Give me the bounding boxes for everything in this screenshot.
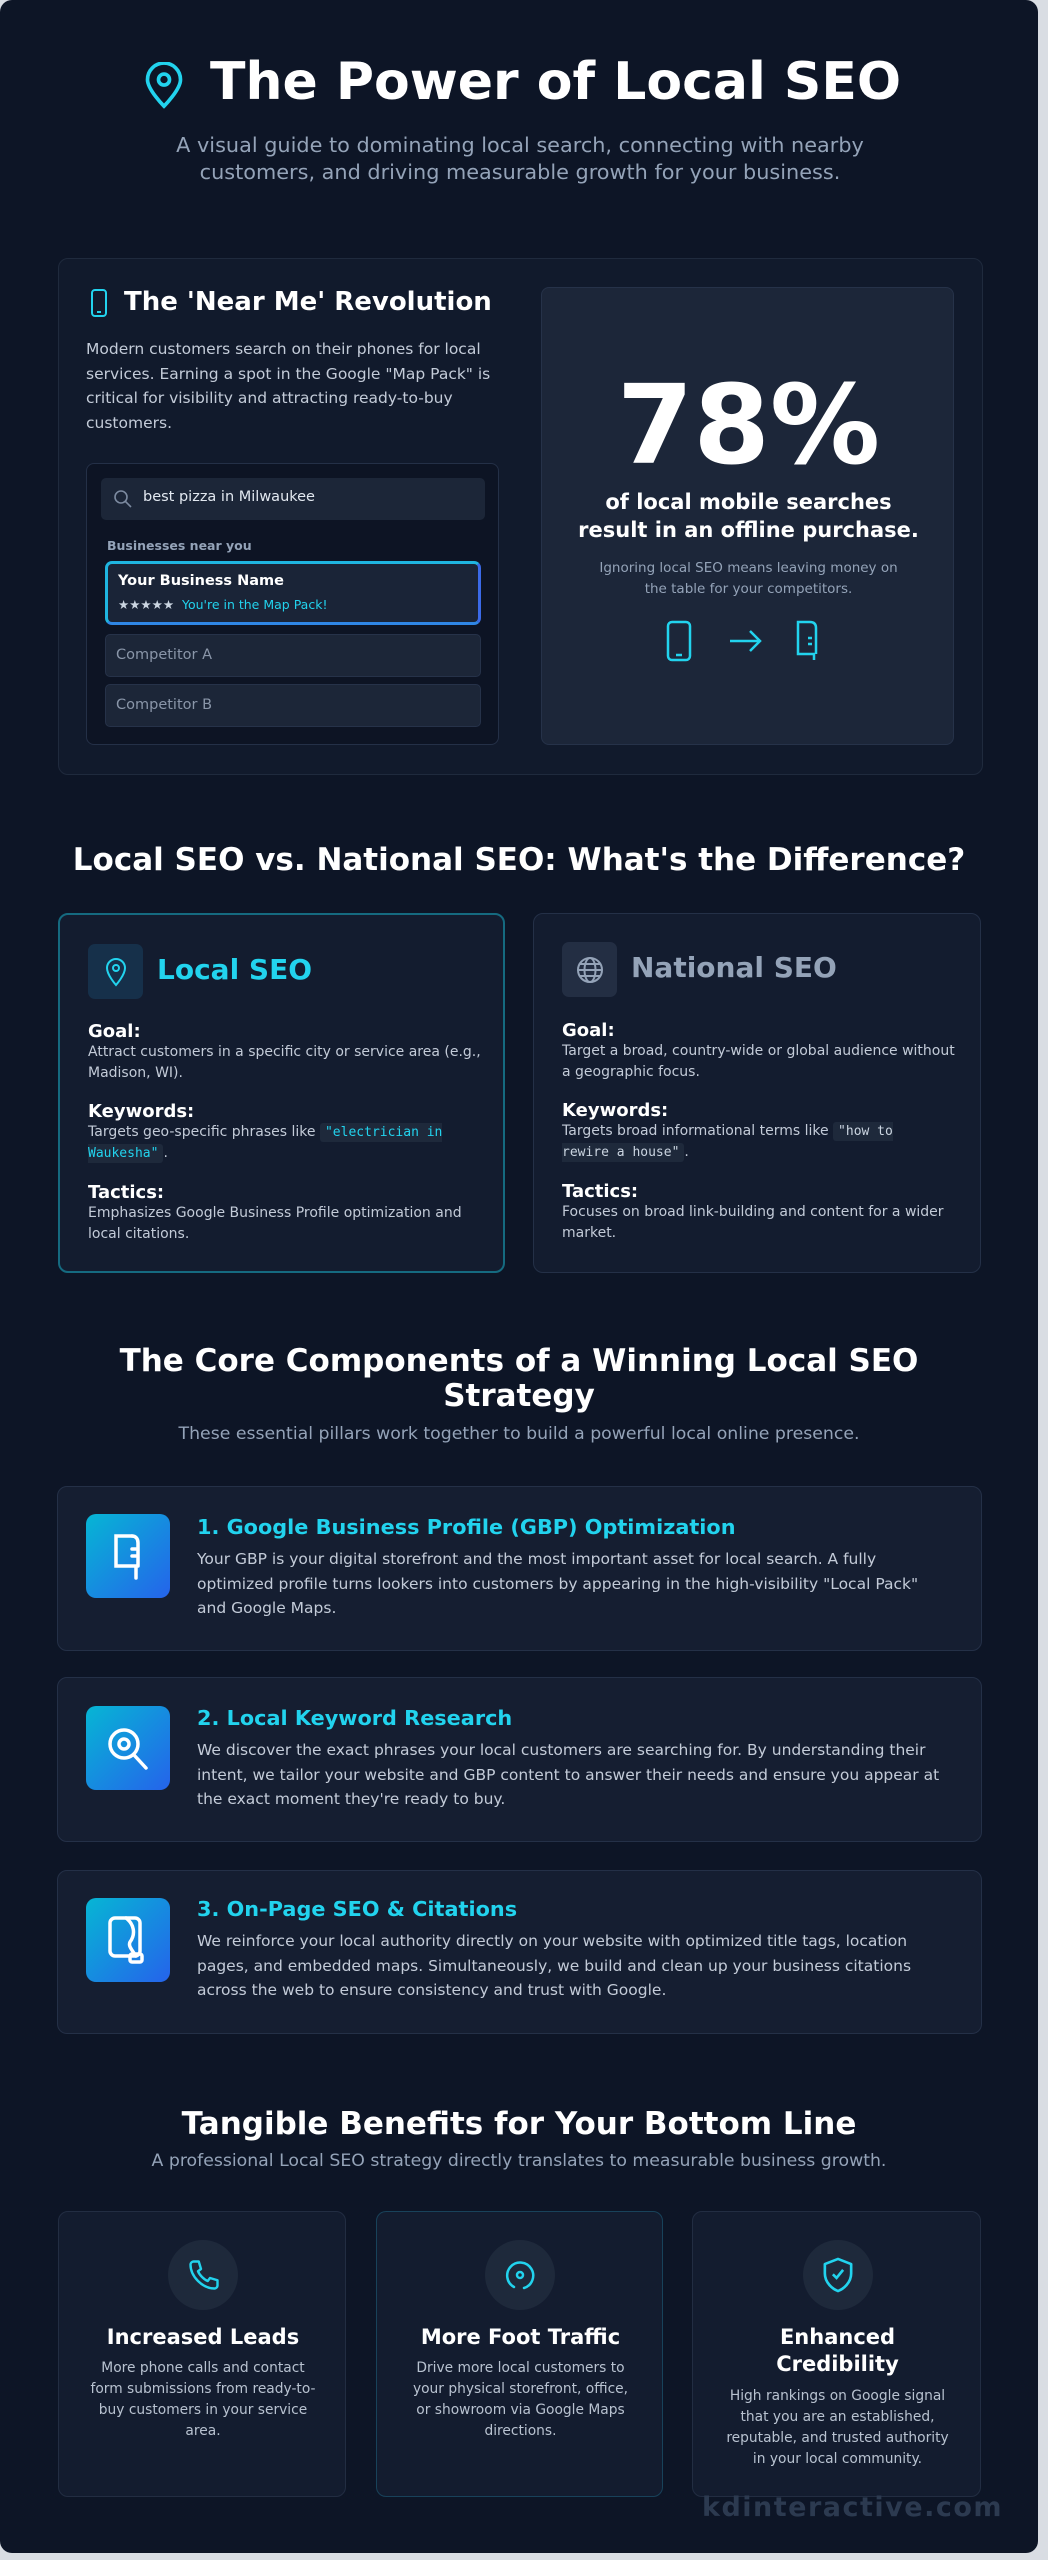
title: 3. On-Page SEO & Citations [197,1897,517,1921]
icon: phone [91,289,107,317]
icon: pin [88,944,143,999]
benefit: leads [58,2211,346,2497]
card title: National SEO [631,951,837,984]
title: 2. Local Keyword Research [197,1706,512,1730]
body: Your GBP is your digital storefront and the most important asset for local search. A fully optimized profile turns lookers into customers by appearing in the high-visibility "Local Pack" and Google Maps. [197,1550,918,1617]
tactics [562,1181,944,1241]
component 2 [57,1677,982,1842]
goal [562,1020,955,1080]
component 1 [57,1486,982,1651]
stat box [541,287,954,745]
heading: The 'Near Me' Revolution [124,287,492,317]
icon: globe [562,942,617,997]
goal: Goal: [88,1021,141,1042]
card title: Local SEO [157,953,312,986]
heading: core components: The Core Components of a Winning Local SEO Strategy [120,1343,918,1414]
paragraph: Modern customers search on their phones for local services. Earning a spot in the Google "Map Pack" is critical for visibility and attracting ready-to-buy customers. [86,340,490,432]
search bar [101,478,485,520]
competitor A [105,634,481,677]
keywords: Targets geo-specific phrases like "electrician in Waukesha" . [88,1124,442,1161]
component 3 [57,1870,982,2034]
stat caption [578,490,919,542]
tactics: Emphasizes Google Business Profile optimization and local citations. [88,1205,462,1242]
subtitle: A visual guide to dominating local search, connecting with nearby customers, and driving measurable growth for your business. [176,133,864,184]
body: More phone calls and contact form submissions from ready-to-buy customers in your service area. [90,2360,316,2439]
body: High rankings on Google signal that you are an established, reputable, and trusted authority in your local community. [726,2388,949,2467]
benefit: credibility [692,2211,981,2497]
stat caption: of local mobile searches [605,490,892,514]
competitor B [105,684,481,727]
icon: location target [485,2240,555,2310]
competitor B: Competitor B [116,697,212,713]
keywords: Targets broad informational terms like "how to rewire a house" . [562,1123,893,1160]
body: Drive more local customers to your physical storefront, office, or showroom via Google Maps directions. [413,2360,628,2439]
label: Businesses near you [107,538,252,553]
icon: shield [803,2240,873,2310]
goal [88,1021,481,1081]
title: Increased Leads [107,2325,299,2349]
tactics: Focuses on broad link-building and content for a wider market. [562,1204,944,1241]
title [776,2325,899,2376]
highlighted listing: Your Business Name [118,573,284,589]
body: We reinforce your local authority directly on your website with optimized title tags, location pages, and embedded maps. Simultaneously, we build and clean up your business citations across the web to ensure consistency and trust with Google. [197,1932,911,1999]
title: Enhanced [780,2325,895,2349]
tactics: Tactics: [562,1181,638,1202]
icons: phone arrow store [666,620,818,662]
subheading: These essential pillars work together to build a powerful local online presence. [179,1424,859,1444]
heading: benefits: Tangible Benefits for Your Bottom Line [182,2106,856,2142]
keywords [562,1100,893,1162]
panel: local SEO [58,913,505,1273]
heading: local vs national: Local SEO vs. National SEO: What's the Difference? [73,842,965,878]
keywords: Keywords: [562,1100,668,1121]
search mockup [86,463,499,745]
tactics [88,1182,462,1242]
stat caption: result in an offline purchase. [578,518,919,542]
title: More Foot Traffic [421,2325,620,2349]
icon: devices [86,1898,170,1982]
body: We discover the exact phrases your local customers are searching for. By understanding their intent, we tailor your website and GBP content to answer their needs and ensure you appear at the exact moment they're ready to buy. [197,1741,939,1808]
title: 1. Google Business Profile (GBP) Optimization [197,1515,736,1539]
icon: title pin [146,62,182,109]
benefit: foot traffic [376,2211,663,2497]
title: The Power of Local SEO [210,52,901,112]
icon: phone [168,2240,238,2310]
goal: Attract customers in a specific city or service area (e.g., Madison, WI). [88,1044,481,1081]
keywords [88,1101,442,1163]
panel: national SEO [533,913,981,1273]
stat note: Ignoring local SEO means leaving money on the table for your competitors. [599,560,898,597]
keywords: Keywords: [88,1101,194,1122]
goal: Goal: [562,1020,615,1041]
competitor A: Competitor A [116,647,212,663]
panel: near me revolution [58,258,983,775]
search bar: best pizza in Milwaukee [143,489,315,505]
subheading: A professional Local SEO strategy directly translates to measurable business growth. [152,2151,886,2171]
tactics: Tactics: [88,1182,164,1203]
highlighted listing: ★★★★★ You're in the Map Pack! [118,597,327,612]
icon: search target [86,1706,170,1790]
highlighted listing [105,561,481,625]
watermark: kdinteractive.com [702,2492,1003,2523]
stat number: 78% [617,361,880,489]
title: Credibility [776,2352,899,2376]
goal: Target a broad, country-wide or global audience without a geographic focus. [562,1043,955,1080]
icon: storefront [86,1514,170,1598]
